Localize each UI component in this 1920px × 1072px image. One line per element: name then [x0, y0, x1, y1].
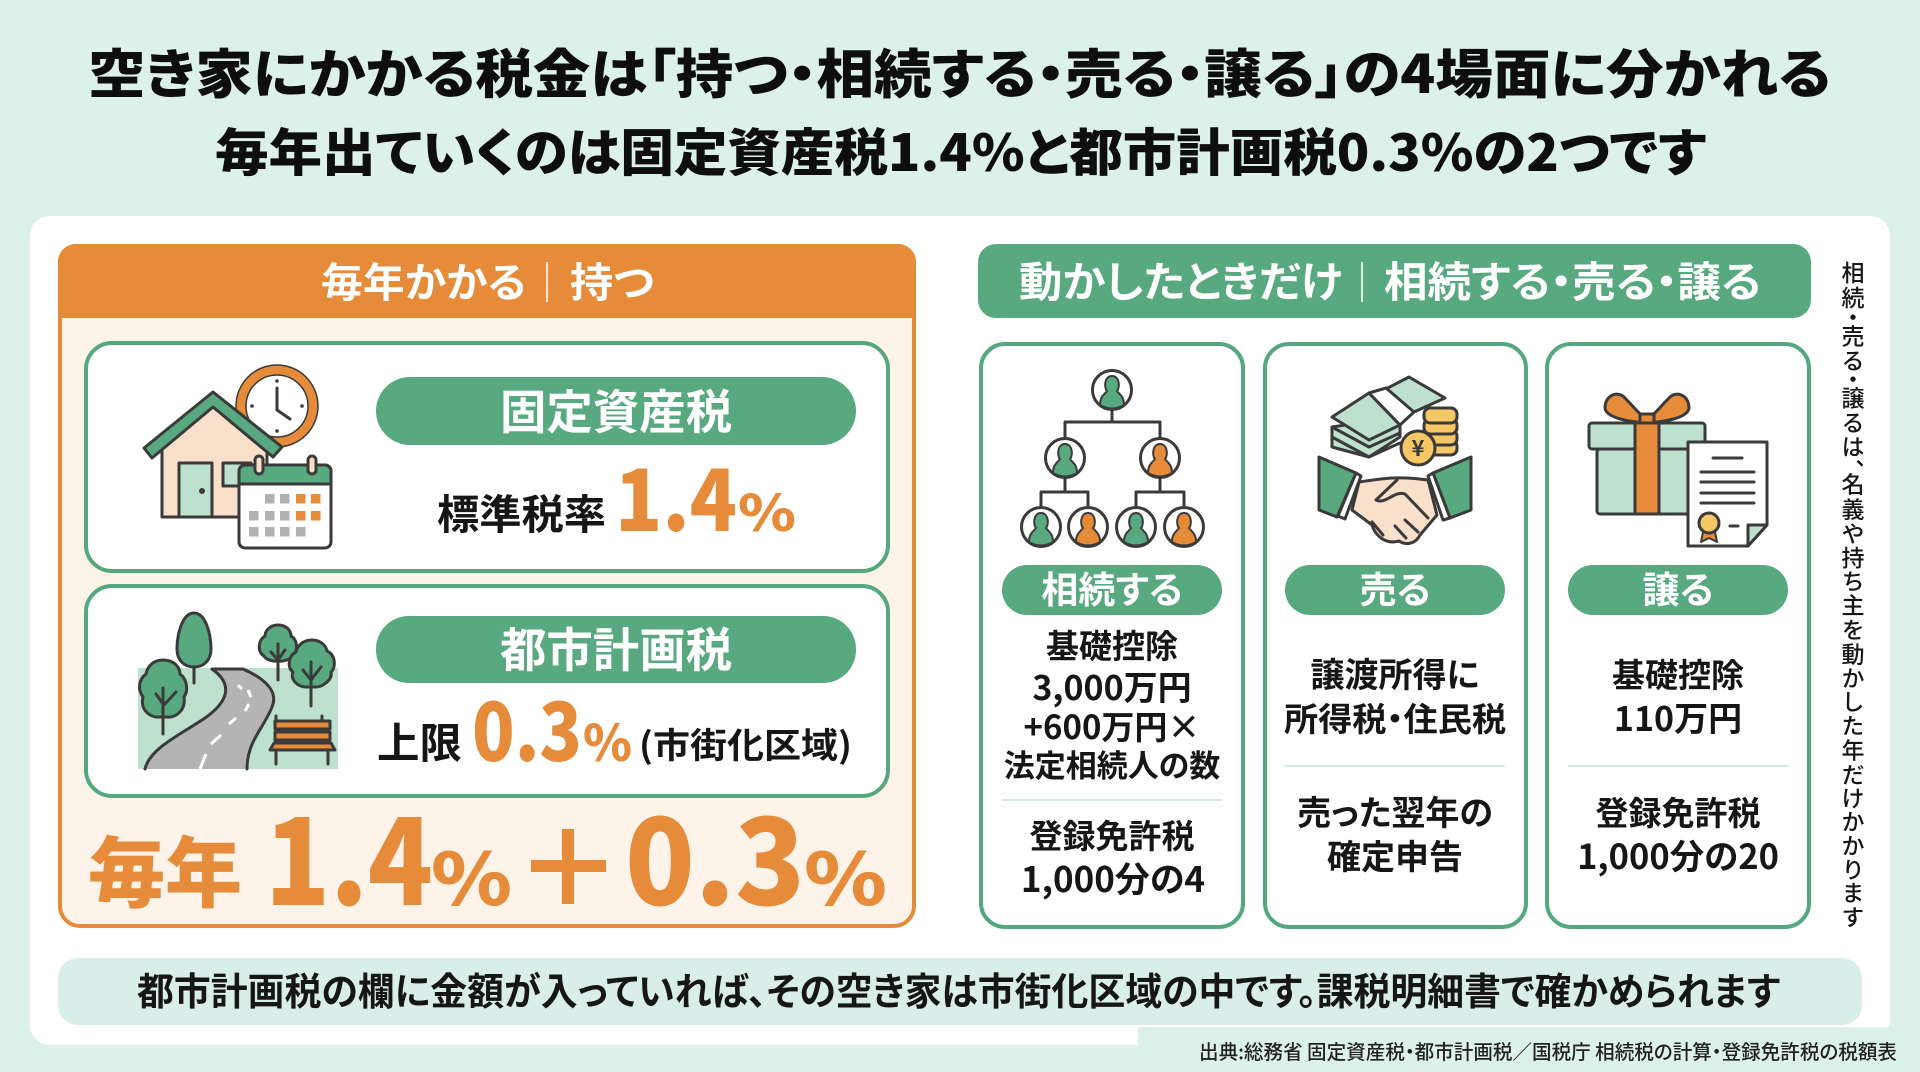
right header bar: 相続する・売る・譲る	[1384, 249, 1761, 310]
transfer: basic deduction	[1612, 649, 1744, 741]
icon: money and handshake	[1319, 377, 1471, 543]
icon: house, clock and calendar	[144, 365, 331, 548]
panel: annual taxes (left)	[58, 244, 916, 939]
white main panel	[30, 216, 1890, 1045]
standard rate 1.4%: 標準税率	[437, 481, 606, 541]
inherit: basic deduction: +600万円×	[1024, 701, 1200, 749]
card: fixed asset tax	[86, 343, 888, 571]
icon: family tree	[1022, 370, 1204, 546]
card: inherit	[981, 344, 1243, 927]
inherit: registration tax: 1,000分の4	[1021, 852, 1205, 903]
icon: money and handshake: ¥	[1412, 431, 1425, 463]
sell: capital gains	[1284, 648, 1506, 741]
standard rate 1.4%: 1.4	[615, 435, 737, 556]
pill: city planning tax	[376, 612, 856, 683]
annual total formula: 0.3	[625, 768, 805, 939]
inherit: basic deduction: 法定相続人の数	[1004, 741, 1220, 786]
inherit: registration tax: 登録免許税	[1030, 810, 1194, 858]
card: sell	[1265, 344, 1526, 927]
inherit: basic deduction	[1004, 620, 1220, 786]
main title: 空き家にかかる税金は「持つ・相続する・売る・譲る」の4場面に分かれる	[88, 33, 1831, 109]
transfer: registration tax: 登録免許税	[1596, 787, 1760, 835]
transfer: registration tax	[1577, 787, 1779, 879]
card: city planning tax	[86, 586, 888, 796]
inherit: registration tax	[1021, 810, 1205, 903]
icon: park with road and bench	[138, 613, 338, 769]
inherit: basic deduction: 3,000万円	[1032, 661, 1192, 710]
pill: sell	[1285, 560, 1505, 615]
upper limit 0.3%: %	[583, 704, 632, 776]
annual total formula: 毎年	[88, 813, 242, 924]
annual total formula	[88, 768, 887, 939]
pill: transfer	[1568, 560, 1788, 615]
standard rate 1.4%	[437, 435, 796, 556]
card: transfer	[1547, 344, 1809, 927]
upper limit 0.3%	[377, 669, 852, 785]
annual total formula: %	[431, 821, 512, 926]
pill: fixed asset tax: 固定資産税	[500, 374, 732, 443]
annual total formula: %	[804, 821, 887, 926]
left panel header bar	[58, 244, 916, 318]
pill: sell: 売る	[1359, 560, 1431, 614]
icon: gift and document	[1589, 394, 1767, 546]
standard rate 1.4%: %	[738, 474, 796, 546]
pill: inherit: 相続する	[1041, 560, 1183, 614]
transfer: registration tax: 1,000分の20	[1577, 829, 1779, 879]
sell: tax return: 売った翌年の	[1297, 786, 1493, 835]
bottom note bar: 都市計画税の欄に金額が入っていれば、その空き家は市街化区域の中です。課税明細書で確かめられます	[137, 961, 1780, 1016]
inherit: basic deduction: 基礎控除	[1046, 620, 1178, 668]
sell: tax return: 確定申告	[1327, 830, 1463, 879]
transfer: basic deduction: 110万円	[1614, 692, 1742, 741]
upper limit 0.3%: 0.3	[472, 669, 582, 785]
pill: city planning tax: 都市計画税	[500, 612, 732, 681]
pill: inherit	[1002, 560, 1222, 615]
annual total formula: 1.4	[265, 768, 433, 939]
right header bar	[978, 244, 1811, 318]
upper limit 0.3%: 上限	[377, 710, 462, 771]
left panel heading: 毎年かかる	[321, 249, 526, 309]
sell: tax return	[1297, 786, 1493, 879]
right header bar: 動かしたときだけ	[1019, 249, 1342, 310]
left panel heading: 持つ	[570, 249, 654, 309]
source patch and citation: 出典:総務省 固定資産税・都市計画税／国税庁 相続税の計算・登録免許税の税額表	[1199, 1036, 1897, 1065]
left panel heading	[321, 249, 654, 309]
pill: transfer: 譲る	[1642, 560, 1714, 614]
pill: fixed asset tax	[376, 374, 856, 445]
transfer: basic deduction: 基礎控除	[1612, 649, 1744, 697]
sell: capital gains: 譲渡所得に	[1311, 648, 1479, 697]
vertical side note: 相続・売る・譲るは、名義や持ち主を動かした年だけかかります	[1836, 261, 1870, 927]
source patch and citation	[1138, 1027, 1920, 1072]
subtitle: 毎年出ていくのは固定資産税1.4%と都市計画税0.3%の2つです	[215, 112, 1706, 186]
sell: capital gains: 所得税・住民税	[1284, 693, 1506, 741]
upper limit 0.3%: (市街化区域)	[639, 718, 852, 769]
